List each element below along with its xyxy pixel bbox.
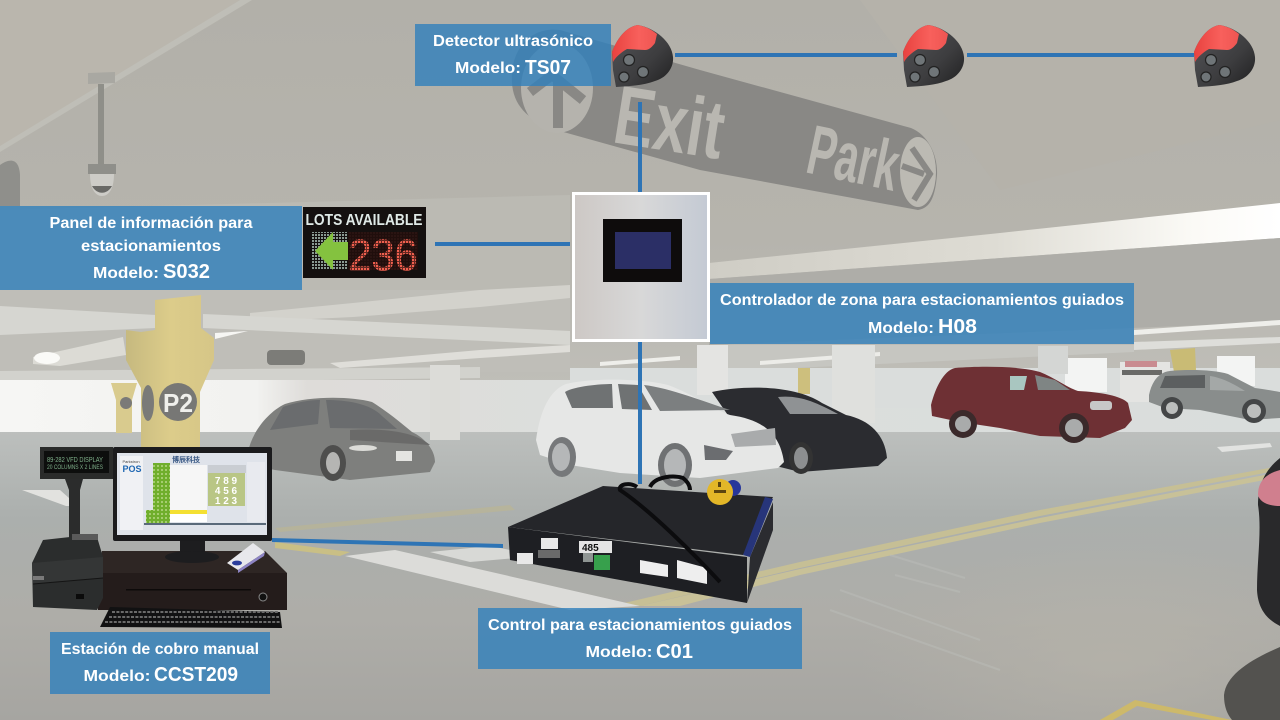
label: manual payment station: CCST209	[154, 664, 238, 686]
parking guidance controller	[508, 477, 773, 603]
information panel: lots available	[303, 207, 426, 280]
security camera	[88, 72, 116, 196]
power cable	[620, 477, 720, 582]
monitor: 4 5 6	[215, 486, 238, 497]
monitor: POS	[122, 464, 142, 474]
floor markings	[22, 443, 1280, 720]
monitor: 7 8 9	[215, 476, 238, 487]
exit and park sign: Exit	[608, 69, 731, 177]
label: parking guidance controller: C01	[656, 641, 693, 663]
exit and park sign: Park	[801, 112, 907, 206]
zone controller device	[572, 192, 710, 342]
label: parking guidance controller: Modelo:	[586, 644, 652, 661]
parked cars	[248, 367, 1280, 720]
manual payment station	[32, 447, 287, 628]
monitor: Parkstron	[122, 459, 140, 464]
car: dark sedan	[712, 388, 887, 474]
floor	[0, 432, 1280, 720]
information panel: lots available: 236	[348, 231, 418, 280]
car: grey sedan	[248, 398, 435, 481]
customer pole display	[40, 447, 113, 540]
label: information panel: S032	[163, 261, 210, 283]
detector ultrasonic unit 1	[612, 25, 673, 87]
ports and stickers: 485	[582, 543, 599, 554]
label: information panel: Modelo:	[93, 265, 159, 282]
label: ultrasonic detector: Detector ultrasónico	[433, 33, 593, 50]
label: ultrasonic detector	[415, 24, 611, 86]
label: zone controller: H08	[938, 316, 977, 338]
ceiling rail	[0, 0, 252, 152]
label: information panel: estacionamientos	[81, 238, 221, 255]
car: white suv	[536, 380, 784, 487]
label: information panel: Panel de información para	[50, 215, 253, 232]
label: manual payment station: Estación de cobro manual	[61, 641, 259, 658]
ceiling beams	[0, 203, 1280, 384]
label: parking guidance controller	[478, 608, 802, 669]
customer pole display: 20 COLUMNS X 2 LINES	[47, 465, 103, 471]
horizon glare and back wall	[0, 380, 1280, 435]
label: zone controller: Modelo:	[868, 320, 934, 337]
monitor: 1 2 3	[215, 496, 238, 507]
label: parking guidance controller: Control para estacionamientos guiados	[488, 617, 792, 634]
connector lines	[272, 53, 1194, 548]
columns	[111, 295, 1196, 450]
ceiling side object	[0, 161, 20, 206]
label: ultrasonic detector: TS07	[525, 57, 571, 79]
detector ultrasonic unit 2	[903, 25, 964, 87]
keyboard	[100, 607, 282, 628]
receipt printer	[32, 534, 103, 610]
label: information panel	[0, 206, 302, 290]
label: ultrasonic detector: Modelo:	[455, 60, 521, 77]
label: manual payment station: Modelo:	[84, 668, 150, 685]
monitor	[113, 447, 272, 563]
detector ultrasonic unit 3	[1194, 25, 1255, 87]
label: manual payment station	[50, 632, 270, 694]
label: zone controller: Controlador de zona para estacionamientos guiados	[720, 292, 1124, 309]
ports and stickers	[517, 538, 707, 584]
car: near right edge	[1257, 458, 1280, 626]
label: zone controller	[710, 283, 1134, 344]
yellow plug	[707, 479, 741, 505]
information panel: lots available: LOTS AVAILABLE	[306, 212, 423, 229]
cash drawer	[98, 551, 287, 610]
car: grey suv	[1149, 370, 1280, 423]
car: red suv	[931, 367, 1132, 443]
columns: P2	[163, 388, 193, 418]
customer pole display: 89-282 VFD DISPLAY	[47, 457, 103, 464]
exit and park sign	[512, 30, 937, 210]
monitor: 博辰科技	[172, 455, 201, 464]
card reader	[227, 543, 265, 573]
